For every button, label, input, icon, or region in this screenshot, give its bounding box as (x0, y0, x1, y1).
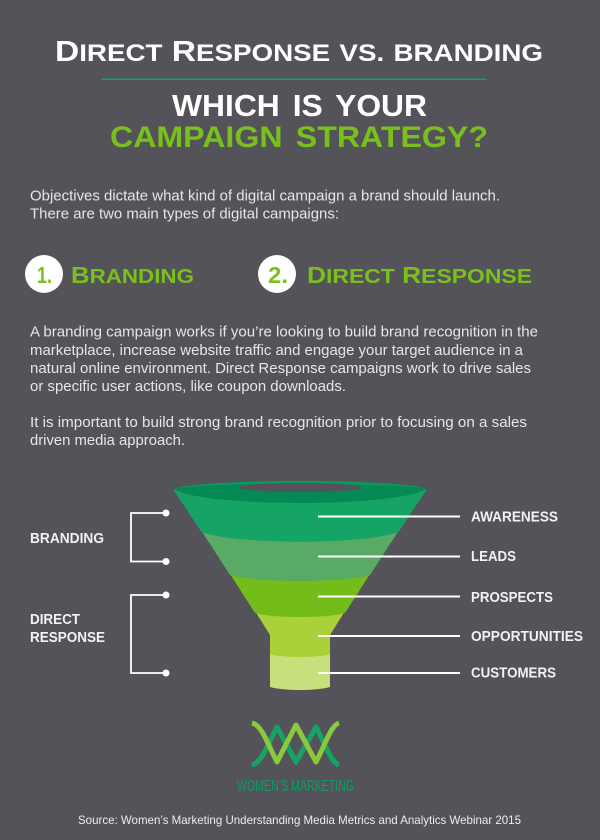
body text: A branding campaign works if you’re looking to build brand recognition in the (30, 324, 538, 340)
bracket: direct response: RESPONSE (30, 630, 105, 646)
funnel stage: prospects: PROSPECTS (471, 590, 553, 606)
funnel band: opportunities (255, 611, 345, 657)
bracket: branding: BRANDING (30, 531, 104, 547)
body text (30, 324, 538, 449)
heading: direct response: DIRECT RESPONSE (307, 262, 532, 288)
funnel stage: customers: CUSTOMERS (471, 666, 556, 682)
body text: It is important to build strong brand recognition prior to focusing on a sales (30, 415, 527, 431)
heading: branding: BRANDING (71, 262, 194, 288)
heading: branding (25, 255, 194, 293)
funnel band: awareness (173, 489, 427, 542)
logo: women's marketing (237, 723, 354, 795)
intro text: There are two main types of digital campaigns: (30, 206, 339, 222)
funnel band: leads (202, 531, 398, 581)
funnel opening (238, 483, 362, 492)
bracket: branding (30, 510, 170, 565)
subtitle: WHICH IS YOUR (172, 88, 427, 123)
heading: branding: 1. (37, 262, 52, 288)
funnel stage: awareness: AWARENESS (471, 510, 558, 526)
subtitle (110, 88, 488, 154)
body text: or specific user actions, like coupon downloads. (30, 379, 346, 395)
bracket: direct response (30, 592, 170, 676)
heading: direct response (258, 255, 532, 293)
body text: natural online environment. Direct Response campaigns work to drive sales (30, 361, 531, 377)
heading: direct response: 2. (268, 262, 288, 288)
funnel stage: leads: LEADS (471, 549, 516, 565)
funnel band: prospects (230, 574, 370, 617)
body text: marketplace, increase website traffic and engage your target audience in a (30, 343, 524, 359)
bracket: direct response: DIRECT (30, 612, 80, 628)
subtitle: CAMPAIGN STRATEGY? (110, 121, 488, 154)
funnel rim (173, 481, 427, 503)
source note: Source: Women’s Marketing Understanding Media Metrics and Analytics Webinar 2015 (78, 813, 521, 827)
funnel stage: opportunities: OPPORTUNITIES (471, 629, 583, 645)
funnel chart (173, 481, 427, 690)
intro text (30, 188, 500, 222)
title: DIRECT RESPONSE VS. BRANDING (55, 36, 543, 68)
funnel band: customers (270, 650, 330, 690)
logo: women's marketing: WOMEN’S MARKETING (237, 778, 354, 795)
intro text: Objectives dictate what kind of digital campaign a brand should launch. (30, 188, 500, 204)
body text: driven media approach. (30, 433, 185, 449)
